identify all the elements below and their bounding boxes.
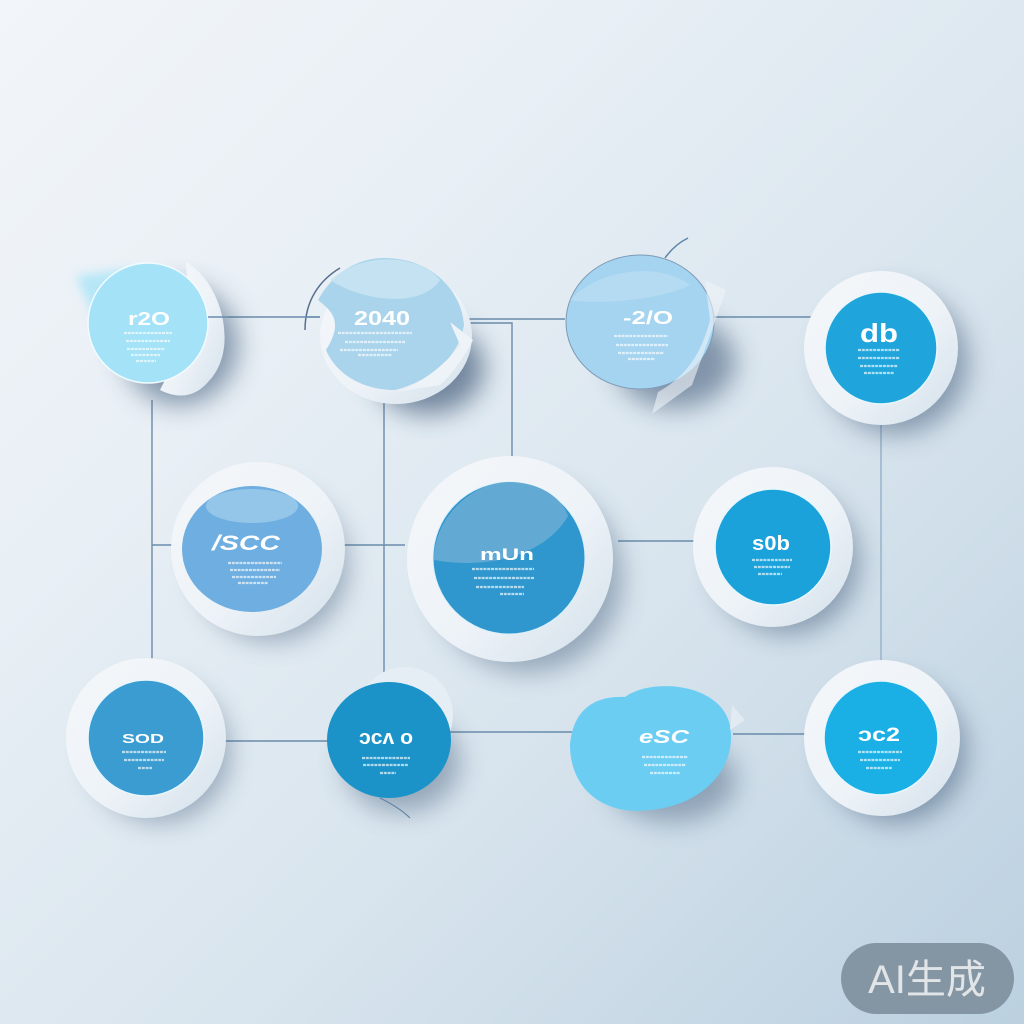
connector lines: [152, 317, 881, 741]
label: -2/O: [623, 308, 673, 328]
node 5 mid-left: [171, 462, 348, 641]
text lines: [752, 560, 792, 574]
text lines: [362, 758, 410, 773]
node 11 bottom-right: [804, 660, 966, 822]
node 6 center: [407, 456, 622, 672]
label: /SCC: [211, 532, 281, 555]
label: r2O: [128, 309, 170, 329]
node 2 top: [305, 258, 484, 414]
text lines: [858, 752, 902, 768]
label: eSC: [639, 727, 690, 747]
text lines: [124, 333, 172, 361]
node 9 bottom: [327, 667, 460, 818]
label: db: [860, 318, 898, 348]
text lines: [122, 752, 166, 768]
text lines: [228, 563, 282, 583]
text lines: [614, 336, 668, 359]
label: SOD: [122, 731, 164, 746]
node 10 bottom blob: [570, 686, 745, 822]
text lines: [338, 333, 412, 355]
badge: AI generated: AI生成: [868, 958, 986, 1002]
text lines: [642, 757, 688, 773]
text lines: [472, 569, 534, 594]
text lines: [858, 350, 900, 373]
badge: AI generated: [841, 943, 1014, 1014]
label: s0b: [752, 533, 790, 555]
label: ɔc2: [858, 725, 900, 746]
label: 2040: [354, 308, 410, 330]
label: mUn: [480, 545, 534, 564]
node 7 mid-right: [693, 467, 859, 634]
node 4 top-right: [804, 271, 968, 434]
node 1 top-left: [76, 262, 238, 405]
node 3 top: [566, 238, 735, 414]
node 8 bottom-left: [66, 658, 230, 822]
label: ɔcʌ o: [359, 727, 413, 749]
